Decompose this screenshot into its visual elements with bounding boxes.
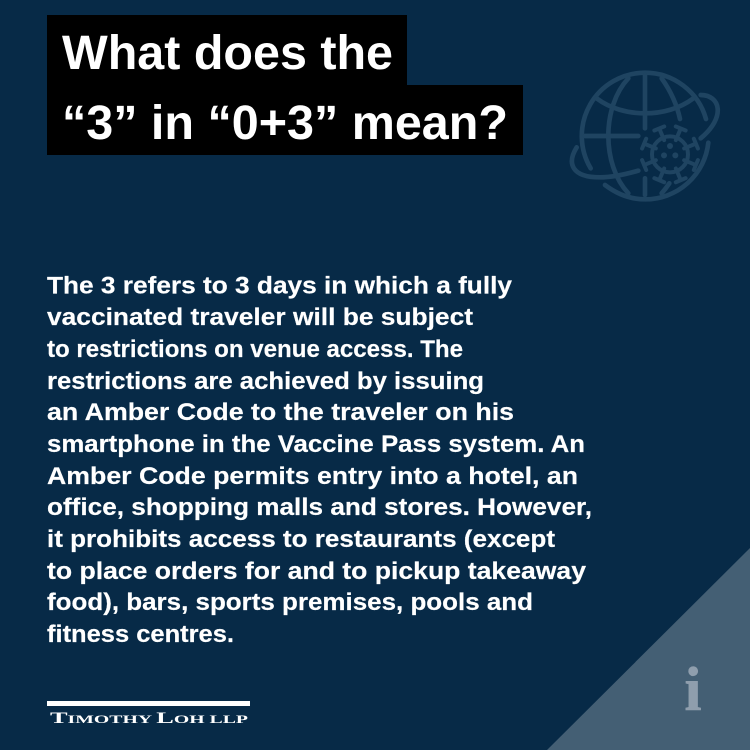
body text: Amber Code permits entry into a hotel, an bbox=[47, 463, 578, 490]
logo: Timothy Loh LLP: T IMOTHY L OH LLP bbox=[50, 710, 248, 727]
body text: office, shopping malls and stores. However, bbox=[47, 494, 592, 521]
body text: food), bars, sports premises, pools and bbox=[47, 589, 533, 616]
body text: to restrictions on venue access. The bbox=[47, 336, 463, 363]
body text: smartphone in the Vaccine Pass system. An bbox=[47, 431, 585, 458]
body text: The 3 refers to 3 days in which a fully bbox=[47, 272, 512, 300]
body text: it prohibits access to restaurants (except bbox=[47, 526, 555, 553]
body text: vaccinated traveler will be subject bbox=[47, 304, 473, 331]
title bbox=[47, 15, 523, 155]
body text bbox=[47, 272, 592, 648]
logo: Timothy Loh LLP bbox=[47, 701, 250, 727]
title: What does the bbox=[62, 27, 393, 80]
title: “3” in “0+3” mean? bbox=[62, 97, 508, 150]
body text: to place orders for and to pickup takeaway bbox=[47, 558, 586, 585]
icon: info: i bbox=[684, 656, 702, 724]
body text: restrictions are achieved by issuing bbox=[47, 368, 484, 395]
corner triangle bbox=[547, 548, 750, 750]
icon: globe with virus bbox=[572, 73, 718, 199]
body text: an Amber Code to the traveler on his bbox=[47, 399, 514, 426]
body text: fitness centres. bbox=[47, 621, 234, 648]
